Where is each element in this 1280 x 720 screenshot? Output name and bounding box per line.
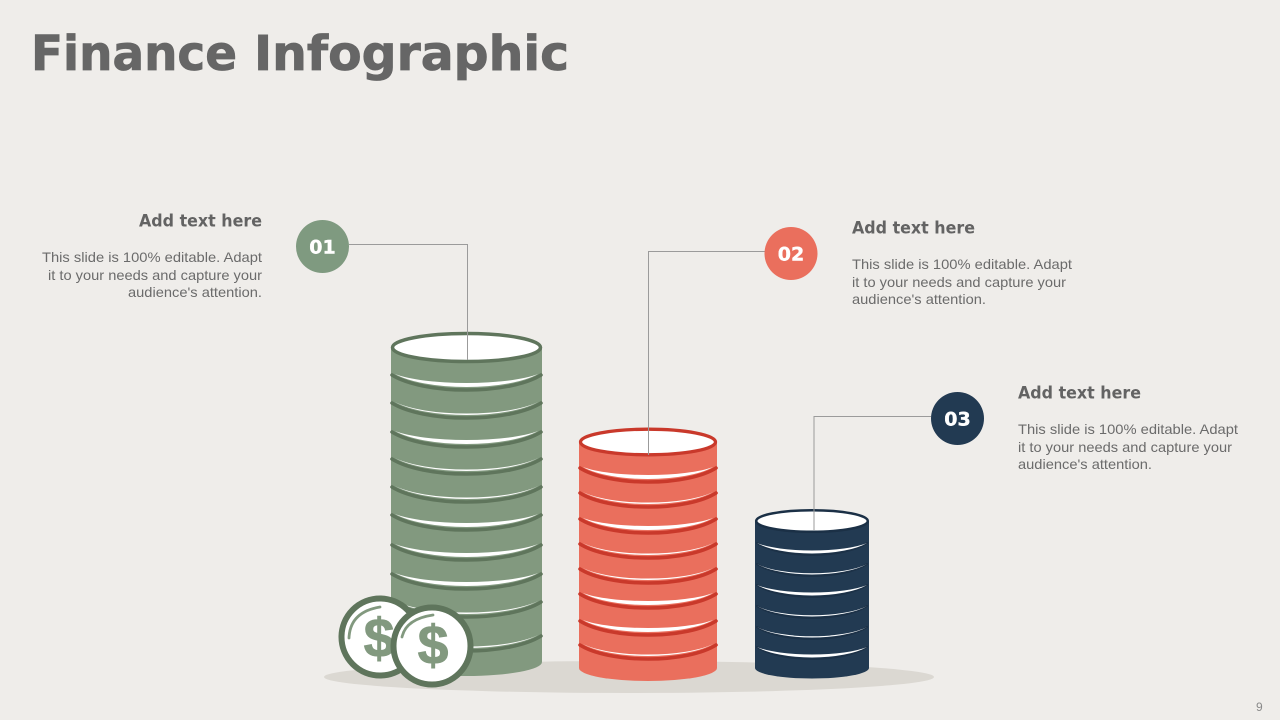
badge 03	[931, 392, 984, 445]
text block 01: Add text here	[139, 212, 262, 230]
badge 02: 02	[778, 244, 804, 266]
title: Infographic	[254, 26, 569, 82]
connector 01	[349, 244, 468, 360]
coin stack: red	[579, 429, 717, 681]
text block 03: it to your needs and capture your	[1018, 439, 1232, 455]
badge 03: 03	[944, 408, 971, 430]
text block 01: audience's attention.	[128, 284, 262, 300]
icon: back dollar coin	[342, 598, 418, 676]
text block 03: This slide is 100% editable. Adapt	[1018, 421, 1238, 437]
title	[31, 26, 569, 82]
coin stack: navy	[755, 510, 869, 678]
badge 01	[296, 220, 349, 273]
text block 03: Add text here	[1018, 384, 1141, 402]
text block 03: audience's attention.	[1018, 456, 1152, 472]
page number: 9	[1256, 700, 1263, 714]
coin stack: green	[391, 334, 542, 676]
connector 02	[648, 252, 765, 455]
icon: back dollar coin: $	[364, 607, 394, 669]
text block 03	[1018, 384, 1238, 472]
text block 02: Add text here	[852, 218, 975, 238]
icon: front dollar coin	[394, 608, 470, 684]
text block 02: This slide is 100% editable. Adapt	[852, 256, 1072, 272]
icon: front dollar coin: $	[418, 614, 448, 676]
text block 02	[852, 218, 1072, 307]
connector 03	[814, 416, 931, 530]
title: Finance	[31, 26, 237, 82]
text block 01: This slide is 100% editable. Adapt	[42, 249, 262, 265]
badge 02	[764, 227, 818, 280]
ground shadow	[324, 661, 934, 693]
text block 02: audience's attention.	[852, 291, 986, 307]
text block 01	[42, 212, 262, 300]
badge 01: 01	[309, 236, 336, 258]
text block 02: it to your needs and capture your	[852, 274, 1066, 290]
text block 01: it to your needs and capture your	[48, 267, 262, 283]
